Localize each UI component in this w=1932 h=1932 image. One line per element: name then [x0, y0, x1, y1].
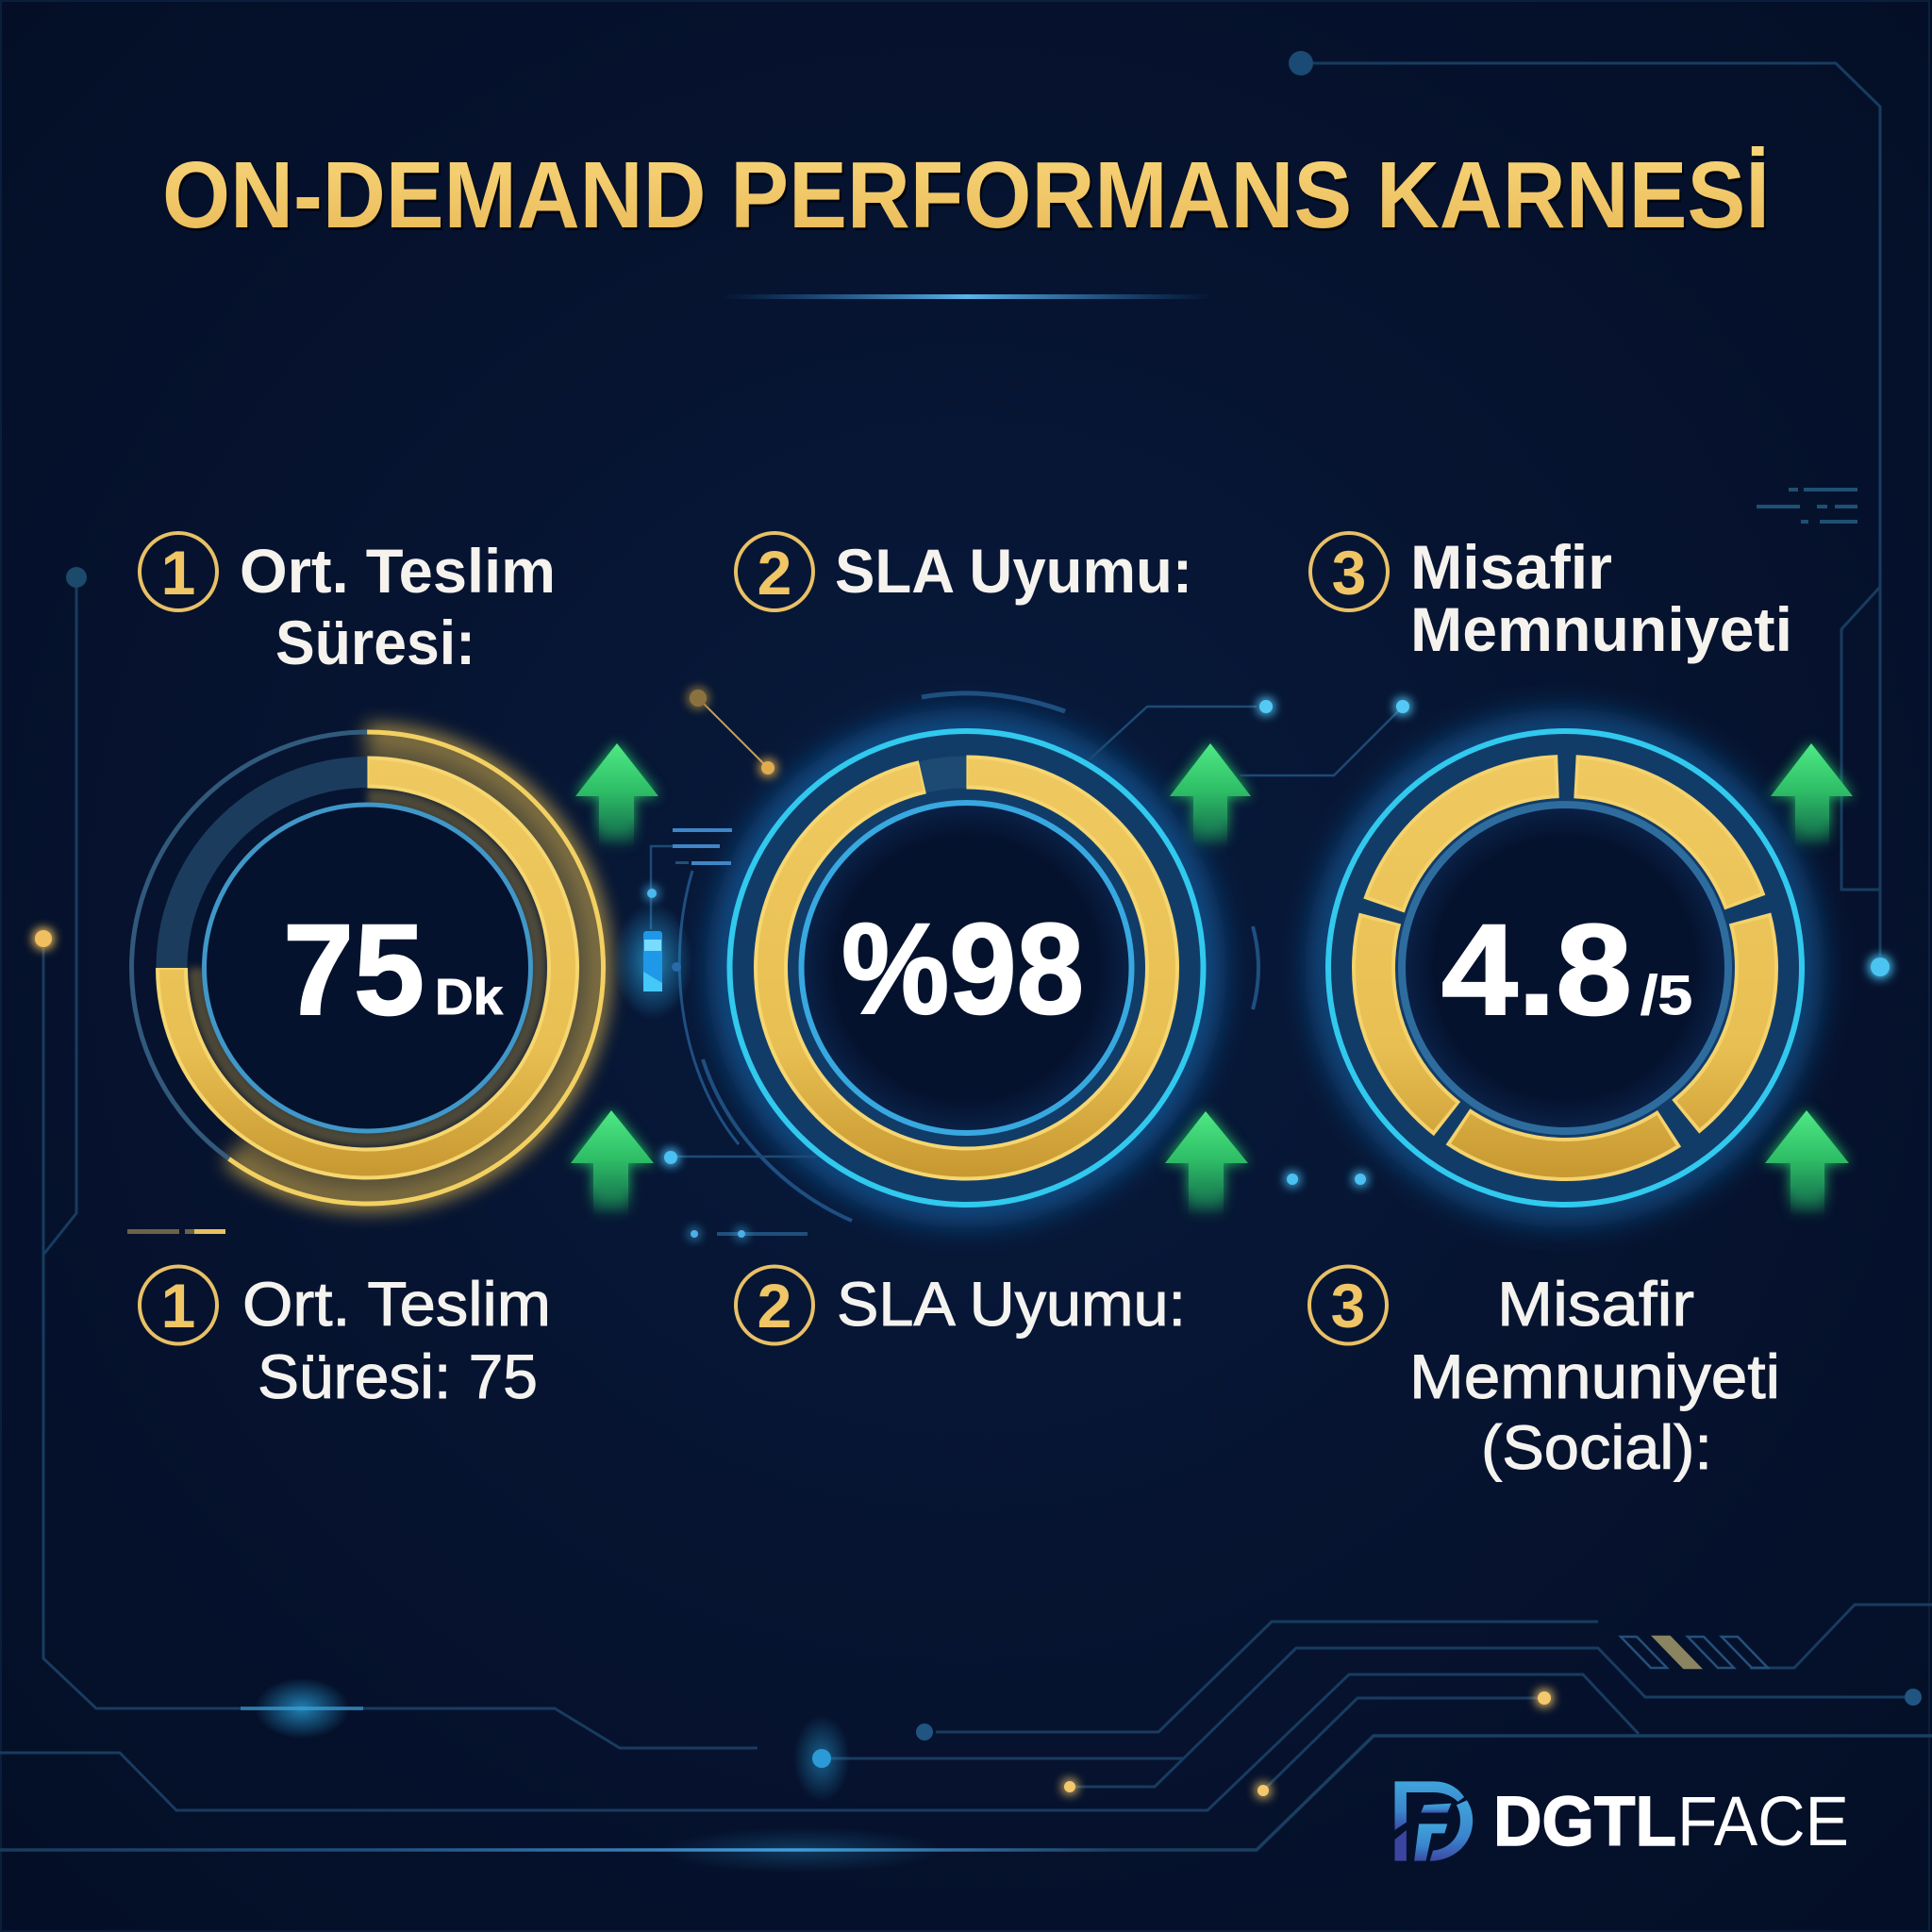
- decor: dots under gauge 2: [691, 1230, 808, 1238]
- arrow: gauge 2 top: [1170, 743, 1251, 847]
- top label 3: [1310, 532, 1792, 664]
- value: 4.8/5: 4.8: [1441, 898, 1632, 1042]
- wordmark: DGTL: [1493, 1782, 1676, 1860]
- top label 2: 2: [758, 538, 791, 608]
- bottom label 1: Ort. Teslim: [242, 1269, 551, 1339]
- top label 2: [736, 533, 1192, 610]
- bottom label 2: 2: [758, 1271, 791, 1341]
- top label 3: Memnuniyeti: [1410, 594, 1792, 664]
- title: ON-DEMAND PERFORMANS KARNESİ: [162, 142, 1770, 248]
- bottom label 2: [736, 1266, 1186, 1343]
- arrow: gauge 1 top: [575, 743, 658, 847]
- arrow: gauge 2 bottom: [1165, 1111, 1248, 1216]
- bottom label 3: 3: [1331, 1271, 1365, 1341]
- title underline: [722, 294, 1212, 299]
- bottom label 3: (Social):: [1481, 1412, 1712, 1482]
- star segments: [1374, 776, 1757, 1159]
- circuit: parallelogram chips: [1621, 1637, 1768, 1668]
- top label 1: 1: [161, 538, 195, 608]
- bottom label 1: [140, 1266, 551, 1411]
- gauge 1: teslim suresi: [132, 732, 604, 1204]
- gauge 3: misafir memnuniyeti: [1327, 730, 1803, 1206]
- value: %98: %98: [841, 897, 1084, 1041]
- bottom label 1: 1: [161, 1271, 195, 1341]
- top label 1: [140, 533, 556, 677]
- decor: blue chip and dashes: [613, 828, 732, 1020]
- value: 75 Dk: Dk: [435, 969, 504, 1025]
- bottom label 1: Süresi: 75: [258, 1341, 538, 1411]
- top label 1: Ort. Teslim: [240, 536, 556, 606]
- logo: DGTLFACE: [1395, 1781, 1849, 1861]
- circuit: top right trace: [1289, 51, 1890, 976]
- circuit: top right dashes: [1757, 488, 1857, 524]
- value: 75 Dk: [283, 898, 504, 1042]
- wordmark: FACE: [1677, 1782, 1849, 1860]
- decor: arcs around gauge 2: [679, 693, 1258, 1221]
- top label 3: 3: [1332, 538, 1366, 608]
- title: ON-DEMAND PERFORMANS KARNESİ: [164, 145, 1772, 251]
- value: 4.8/5: /5: [1641, 965, 1692, 1026]
- arrow: gauge 3 bottom: [1765, 1110, 1849, 1216]
- bottom label 3: Memnuniyeti: [1409, 1341, 1780, 1411]
- wordmark: [1493, 1782, 1849, 1860]
- arrow: gauge 1 bottom: [571, 1110, 654, 1216]
- bottom label 3: Misafir: [1497, 1269, 1694, 1339]
- top label 2: SLA Uyumu:: [835, 536, 1192, 606]
- circuit: bottom traces: [0, 1605, 1932, 1873]
- decor: gold dashes under gauge 1: [127, 1229, 225, 1234]
- value: 75 Dk: 75: [283, 898, 425, 1042]
- top label 3: Misafir: [1410, 532, 1612, 602]
- icon: logo mark: [1395, 1781, 1473, 1861]
- bottom label 3: [1309, 1266, 1780, 1482]
- bottom label 2: SLA Uyumu:: [837, 1269, 1186, 1339]
- arrow: gauge 3 top: [1771, 743, 1853, 847]
- top label 1: Süresi:: [275, 608, 475, 677]
- decor: gold connector between gauges: [690, 690, 774, 774]
- circuit: left traces: [35, 567, 758, 1748]
- decor: connector traces: [664, 700, 1409, 1185]
- gauge 2: SLA: [728, 730, 1204, 1206]
